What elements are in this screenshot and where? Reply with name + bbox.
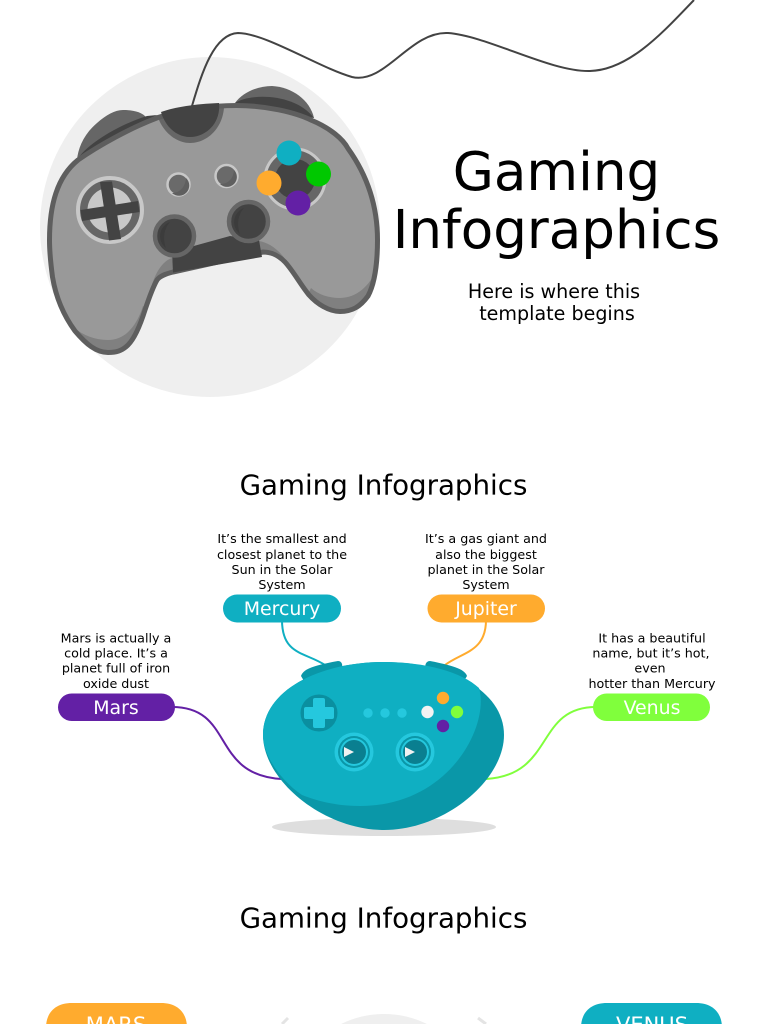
label: mercury: [223, 594, 341, 622]
right arrow hint: [478, 1018, 486, 1024]
text: mercury description: [217, 531, 347, 592]
text: venus description: hotter than Mercury: [588, 676, 716, 691]
icon: grey game controller: [40, 86, 385, 360]
body dark: [263, 662, 504, 830]
label: mercury: Mercury: [244, 598, 320, 620]
indicator dots: [363, 708, 407, 718]
label: mars tab: [46, 1003, 187, 1024]
text: venus description: [588, 630, 716, 691]
text: venus description: It has a beautiful: [598, 630, 706, 646]
top centre notch: [161, 103, 219, 137]
text: mars description: Mars is actually a: [61, 630, 171, 646]
small round button right: [216, 165, 238, 187]
text: mars description: [61, 630, 171, 691]
title: Gaming: [453, 141, 660, 203]
controller body fill and shading: [52, 108, 375, 350]
purple action button: [286, 190, 310, 216]
controller body outline: [50, 106, 378, 352]
text: jupiter description: It’s a gas giant and: [425, 531, 547, 546]
text: mars description: oxide dust: [83, 676, 149, 691]
text: jupiter description: [425, 531, 547, 592]
left shoulder: [301, 661, 342, 681]
top notch ring: [159, 108, 224, 143]
label: venus tab: [581, 1003, 722, 1024]
text: mars description: cold place. It’s a: [64, 646, 168, 660]
left shoulder button: [77, 110, 147, 160]
text: jupiter description: also the biggest: [435, 547, 537, 562]
right stick: [396, 732, 434, 772]
d-pad: [78, 178, 142, 242]
subtitle: Here is where this: [468, 280, 640, 303]
subtitle: [468, 280, 640, 325]
orange action button: [256, 170, 282, 196]
text: jupiter description: System: [462, 577, 510, 592]
body light: [263, 662, 481, 806]
text: jupiter description: planet in the Solar: [428, 562, 545, 577]
left analog stick: [155, 216, 194, 256]
hero background circle: [40, 57, 380, 397]
body lower shading right: [310, 280, 371, 309]
label: venus: Venus: [624, 697, 680, 719]
label: venus: [593, 694, 710, 721]
text: mercury description: System: [258, 577, 306, 592]
green action button: [306, 162, 331, 186]
bottom centre circle: [341, 1014, 427, 1024]
d-pad: [300, 694, 338, 732]
shadow: [272, 818, 496, 836]
label: mars: [58, 694, 175, 721]
action buttons: [421, 692, 463, 732]
title: [393, 141, 720, 261]
right analog stick: [229, 202, 268, 241]
label: mars: Mars: [93, 697, 139, 719]
icon: teal controller: [263, 661, 504, 836]
connector: venus: [486, 707, 596, 779]
section heading 2: Gaming Infographics: [240, 902, 527, 934]
teal action button: [276, 140, 302, 166]
action button base: [265, 149, 325, 209]
centre dark bar: [172, 236, 262, 272]
controller cable: [192, 0, 694, 106]
title: Infographics: [393, 199, 720, 261]
text: mercury description: Sun in the Solar: [232, 562, 333, 577]
connector: mercury: [282, 620, 325, 665]
subtitle: template begins: [479, 302, 635, 325]
connector: mars: [172, 707, 282, 779]
left arrow hint: [282, 1018, 288, 1024]
right shoulder button: [235, 86, 314, 118]
connector: jupiter: [445, 620, 486, 665]
small round button left: [168, 174, 190, 196]
label: jupiter: Jupiter: [454, 598, 517, 620]
label: jupiter: [428, 594, 545, 622]
right shoulder: [425, 661, 467, 681]
body lower shading left: [78, 306, 144, 350]
text: venus description: even: [634, 660, 666, 676]
text: mercury description: It’s the smallest and: [217, 531, 347, 546]
text: venus description: name, but it’s hot,: [592, 646, 710, 660]
left stick: [334, 732, 374, 772]
text: mercury description: closest planet to the: [217, 547, 347, 562]
inner notch shading: [152, 241, 284, 284]
section heading 1: Gaming Infographics: [240, 468, 527, 502]
text: mars description: planet full of iron: [62, 660, 170, 676]
